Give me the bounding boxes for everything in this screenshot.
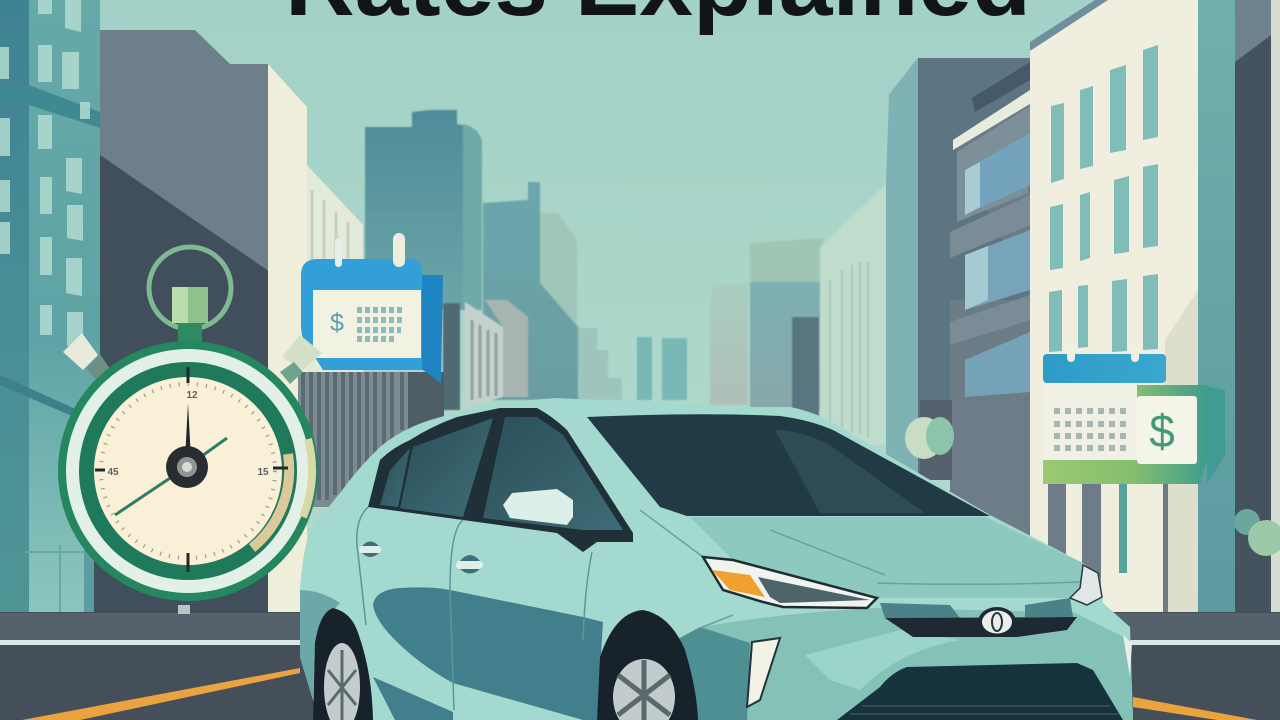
windshield [587,414,990,516]
windshield reflection [775,430,925,513]
door lines [357,507,592,710]
front wheel [597,610,698,720]
right headlight [1070,565,1102,605]
icon: calendar with dollar, left: $ [330,309,344,337]
side mirror [503,489,573,525]
bumper highlight [805,630,960,690]
distant buildings [365,110,887,445]
car fender shade [676,627,750,720]
road [0,605,1280,720]
car front bumper [700,608,1133,720]
car sill [373,677,453,720]
daytime running light [747,638,780,707]
icon: calendar billboard, right: $ [1149,405,1175,457]
car [300,398,1133,720]
icon: calendar with dollar, left [301,233,443,383]
slim grille [885,617,1077,637]
trees [905,417,1280,556]
dial numerals: 45 [107,467,119,478]
upper grille shade [880,598,1073,618]
rear wheel [313,608,373,720]
icon: calendar billboard, right [1043,340,1225,484]
door handles [359,542,483,574]
car body [300,398,1133,720]
left headlight [703,557,877,608]
dial numerals: 12 [186,390,198,401]
rear quarter glass [380,448,410,507]
right bumper light [1123,635,1132,677]
hood lines [640,510,1080,628]
dial numerals [107,390,269,478]
right buildings [886,0,1280,614]
car hood [690,517,1100,598]
car lower door panel [373,587,603,720]
car rear quarter shade [300,590,340,700]
dial numerals: 15 [257,467,269,478]
left buildings [0,0,444,614]
badge [978,607,1016,637]
rear door glass [400,418,493,517]
front door glass [483,417,623,530]
lower grille [837,663,1123,720]
icon: stopwatch [58,247,322,601]
window frame [368,408,633,552]
